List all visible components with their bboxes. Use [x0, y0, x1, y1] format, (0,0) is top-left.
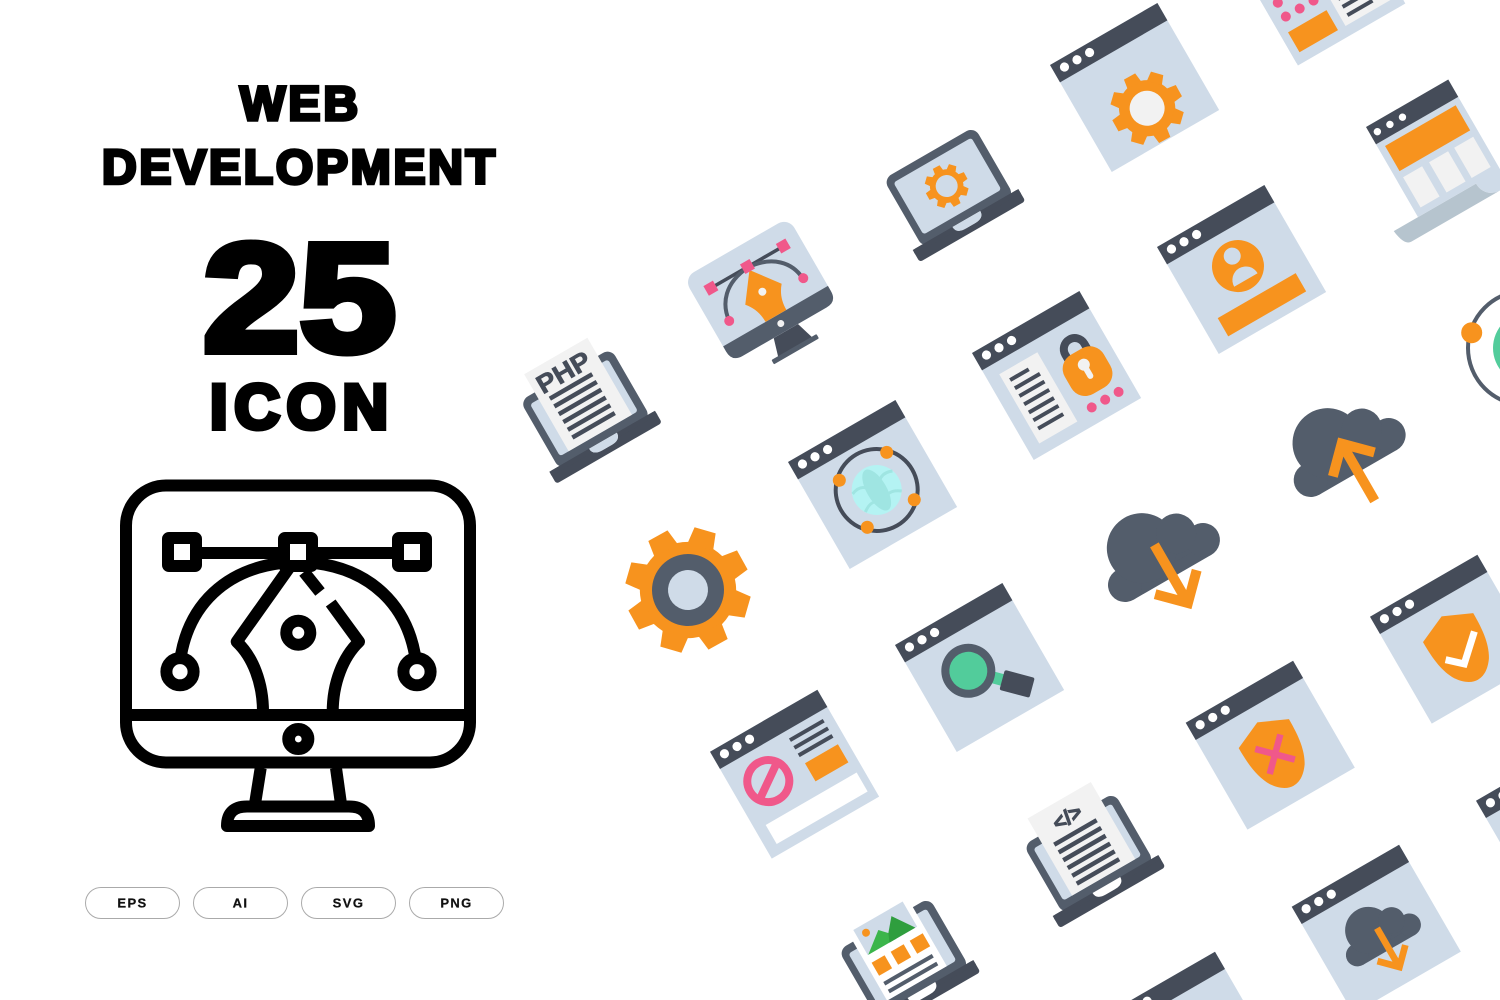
format badge: EPS	[86, 888, 180, 918]
icon: laptop with code document: </>	[1049, 800, 1087, 835]
icon: browser window with blocked sign	[710, 690, 879, 859]
format badge: AI	[194, 888, 288, 918]
icon: web page layout on scroll	[1342, 80, 1500, 247]
format badge: EPS: EPS	[117, 896, 148, 910]
icon: globe with orbit, cropped at right	[1461, 291, 1500, 405]
icon: laptop with gear	[875, 123, 1025, 262]
icon: cloud download inside window	[1328, 885, 1435, 989]
icon: browser window with bug globe	[788, 400, 957, 569]
icon: laptop with PHP document: PHP	[531, 345, 596, 400]
icon: browser window partly cropped at bottom	[1108, 952, 1277, 1000]
icon: browser window with magnifier	[895, 583, 1065, 753]
heading: icon: ICON	[210, 372, 388, 442]
icon: large standalone gear	[611, 513, 765, 667]
icon: laptop with gallery page	[824, 884, 980, 1000]
title: web development: WEB	[240, 78, 358, 131]
icon: laptop with PHP document	[501, 327, 662, 484]
format badge: PNG	[410, 888, 504, 918]
format badge: SVG: SVG	[333, 896, 364, 910]
icon: browser window with shield cross	[1186, 661, 1355, 830]
title: web development	[102, 78, 495, 194]
icon: laptop with code document	[1004, 771, 1165, 928]
icon: browser window partly cropped at right	[1476, 739, 1500, 908]
format badge: PNG: PNG	[440, 896, 473, 910]
icon: desktop monitor with pen tool	[684, 217, 848, 382]
icon: browser window with dots and form, cropped at top	[1235, 0, 1405, 66]
icon: browser window with shield check	[1370, 555, 1500, 724]
format badge: SVG	[302, 888, 396, 918]
icon: cloud download	[1081, 481, 1242, 635]
icon: browser window with gear	[1050, 3, 1226, 184]
format badge: AI: AI	[233, 896, 248, 910]
icon: browser window with padlock	[972, 291, 1141, 460]
icon: cloud upload	[1267, 376, 1428, 532]
icon: browser window with user profile	[1157, 185, 1326, 354]
icon: large outline monitor with pen tool	[126, 486, 470, 826]
title: web development: DEVELOPMENT	[102, 142, 495, 194]
icon: browser window with cloud download	[1292, 845, 1461, 1000]
heading: number 25: 25	[203, 212, 396, 384]
